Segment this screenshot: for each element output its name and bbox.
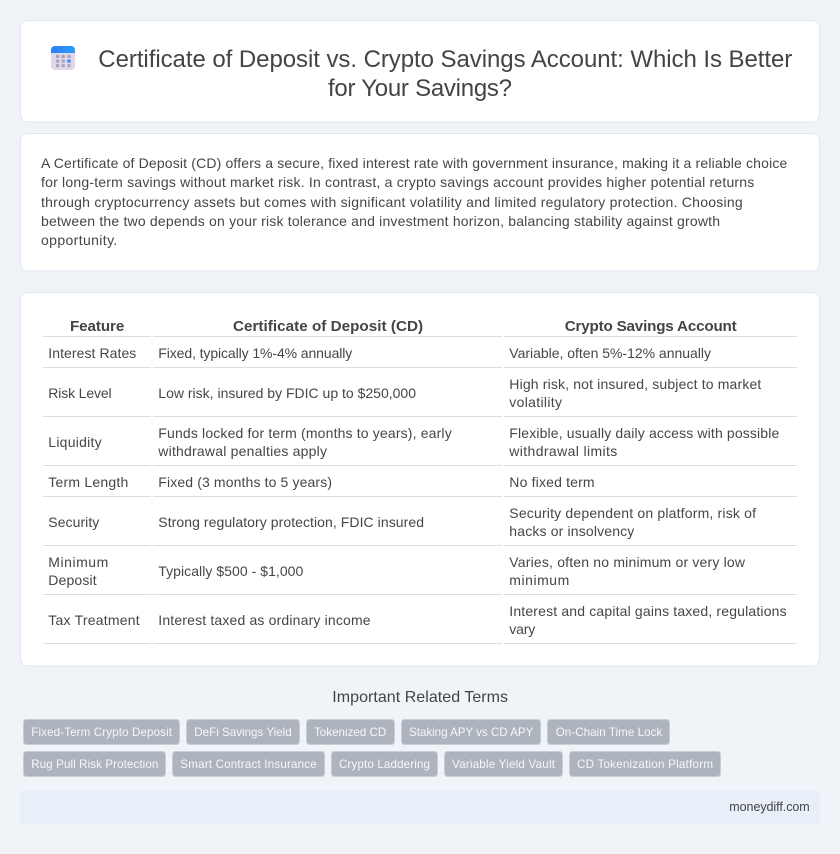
row: minimum deposit: Typically $500 - $1,000 — [158, 563, 304, 579]
row: liquidity: Funds locked for term (months to years), early — [158, 425, 452, 441]
row: term length — [43, 474, 797, 497]
row: tax treatment: Interest and capital gains taxed, regulations — [509, 603, 787, 619]
footer source: moneydiff.com — [729, 800, 810, 814]
table header: Crypto Savings Account — [565, 318, 737, 335]
row: security: Strong regulatory protection, FDIC insured — [158, 514, 424, 530]
tag: Staking APY vs CD APY — [409, 726, 534, 739]
table header: Certificate of Deposit (CD) — [233, 318, 423, 335]
tag: Fixed-Term Crypto Deposit — [31, 726, 173, 739]
heading: related terms: Important Related Terms — [332, 689, 508, 706]
row: risk level — [43, 376, 797, 417]
row: risk level: High risk, not insured, subject to market — [509, 376, 761, 392]
tag — [24, 720, 180, 744]
footer bar — [20, 790, 820, 824]
intro paragraph — [41, 155, 788, 248]
tag: DeFi Savings Yield — [194, 726, 292, 739]
intro paragraph: between the two depends on your risk tolerance and investment horizon, balancing stability against growth — [41, 213, 720, 229]
row: interest rates: Interest Rates — [48, 345, 136, 361]
row: term length: Fixed (3 months to 5 years) — [158, 474, 332, 490]
tag: Smart Contract Insurance — [180, 758, 317, 771]
row: minimum deposit — [43, 554, 797, 595]
icon: calendar — [51, 46, 75, 70]
row: term length: Term Length — [48, 474, 128, 490]
tag — [186, 720, 300, 744]
tag: Tokenized CD — [314, 726, 386, 739]
title: Certificate of Deposit vs. Crypto Savings Account: Which Is Better — [98, 46, 792, 73]
row: security: hacks or insolvency — [509, 523, 634, 539]
row: interest rates — [43, 345, 797, 368]
row: tax treatment — [43, 603, 797, 644]
row: minimum deposit: Deposit — [48, 572, 97, 588]
row: security — [43, 505, 797, 546]
row: liquidity: Liquidity — [48, 434, 102, 450]
row: risk level: Low risk, insured by FDIC up to $250,000 — [158, 385, 416, 401]
intro paragraph: opportunity. — [41, 232, 117, 248]
tag: On-Chain Time Lock — [556, 726, 663, 739]
row: minimum deposit: Varies, often no minimum or very low — [509, 554, 746, 570]
row: liquidity: withdrawal limits — [508, 443, 617, 459]
tag — [402, 720, 540, 744]
panel: comparison table — [20, 292, 820, 666]
row: security: Security — [48, 514, 99, 530]
intro paragraph: A Certificate of Deposit (CD) offers a secure, fixed interest rate with government insurance, making it a reliable choice — [41, 155, 788, 171]
table header — [43, 318, 797, 337]
row: tax treatment: Interest taxed as ordinary income — [158, 612, 371, 628]
row: interest rates: Variable, often 5%-12% annually — [509, 345, 711, 361]
row: tax treatment: vary — [509, 621, 535, 637]
row: liquidity — [43, 425, 797, 466]
row: minimum deposit: minimum — [509, 572, 569, 588]
tag list: related terms — [24, 720, 720, 776]
tag — [444, 752, 562, 776]
tag: Rug Pull Risk Protection — [31, 758, 158, 771]
panel: intro text — [20, 134, 820, 271]
row: interest rates: Fixed, typically 1%-4% annually — [158, 345, 352, 361]
tag: Variable Yield Vault — [452, 758, 556, 771]
row: risk level: volatility — [509, 394, 562, 410]
tag — [332, 752, 438, 776]
title — [98, 46, 792, 102]
tag — [570, 752, 720, 776]
tag — [306, 720, 394, 744]
row: risk level: Risk Level — [48, 385, 112, 401]
intro paragraph: for long-term savings without market risk. In contrast, a crypto savings account provides higher potential returns — [41, 174, 754, 190]
tag — [24, 752, 166, 776]
row: liquidity: Flexible, usually daily access with possible — [509, 425, 780, 441]
tag: Crypto Laddering — [339, 758, 430, 771]
panel: title header — [20, 20, 820, 122]
row: term length: No fixed term — [509, 474, 595, 490]
tag — [548, 720, 670, 744]
table header: Feature — [70, 318, 124, 335]
row: security: Security dependent on platform, risk of — [509, 505, 756, 521]
row: minimum deposit: Minimum — [48, 554, 108, 570]
row: liquidity: withdrawal penalties apply — [157, 443, 327, 459]
title: for Your Savings? — [328, 75, 512, 102]
intro paragraph: through cryptocurrency assets but comes with significant volatility and limited regulatory protection. Choosing — [41, 194, 743, 210]
tag: CD Tokenization Platform — [577, 758, 713, 771]
row: tax treatment: Tax Treatment — [48, 612, 140, 628]
tag — [172, 752, 324, 776]
